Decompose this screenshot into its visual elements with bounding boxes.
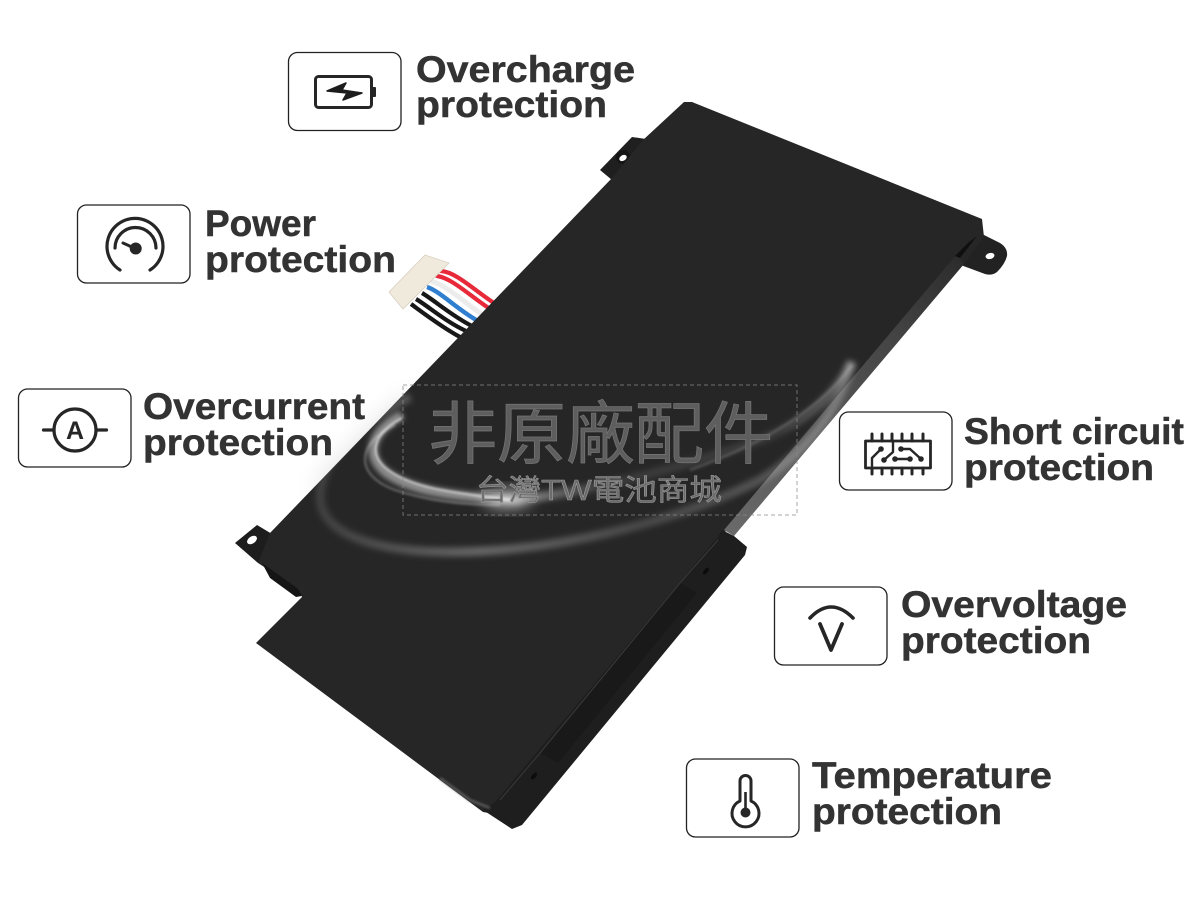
- outer swirl wide: [320, 362, 852, 552]
- label: protection: [901, 620, 1091, 661]
- mounting tab: left: [235, 525, 285, 563]
- feature: temperature protection: [686, 755, 1052, 837]
- icon: circuit chip: [866, 434, 930, 474]
- icon box: [840, 412, 952, 490]
- bottom flap: [483, 530, 747, 829]
- watermark sub text: 台灣TW電池商城: [476, 474, 722, 507]
- watermark: [403, 385, 797, 515]
- icon: gauge: [107, 218, 163, 270]
- connector housing: [389, 255, 449, 309]
- feature: short circuit protection: [840, 411, 1184, 490]
- connector cable: [389, 255, 494, 337]
- battery body: [256, 102, 984, 815]
- icon: ammeter: [44, 409, 106, 451]
- feature: overvoltage protection: [774, 584, 1127, 665]
- icon: ammeter: A: [66, 417, 84, 445]
- wires: black: [411, 293, 472, 337]
- label: protection: [964, 447, 1154, 488]
- slot upper: [702, 567, 710, 575]
- label: Overvoltage: [901, 584, 1127, 625]
- icon: thermometer: [732, 776, 759, 827]
- icon: battery with bolt: [316, 76, 376, 108]
- icon: voltage arc and V: [810, 607, 853, 650]
- far arc glint: [690, 365, 852, 470]
- watermark main text: 非原廠配件: [428, 397, 773, 473]
- icon box: [288, 52, 401, 130]
- wires: blue: [427, 287, 480, 322]
- label: Short circuit: [964, 411, 1184, 452]
- soft shadow near left edge: [310, 400, 440, 490]
- label: Temperature: [812, 755, 1052, 796]
- inner swirl glow: [373, 362, 852, 500]
- feature: overcharge protection: [288, 49, 635, 130]
- label: protection: [205, 239, 396, 280]
- left step shading: [262, 563, 302, 597]
- mounting tab: top: [600, 137, 646, 180]
- inner swirl core: [376, 418, 510, 500]
- icon box: [774, 587, 887, 665]
- label: Power: [205, 203, 316, 244]
- feature: power protection: [78, 203, 396, 283]
- flap recess: [540, 583, 697, 763]
- right edge strip: [724, 254, 964, 536]
- flap inner line: [500, 540, 718, 800]
- connector notch on edge: [955, 236, 977, 258]
- wires: white: [431, 281, 484, 316]
- inner swirl second line: [365, 425, 500, 505]
- mounting tab: right: [958, 232, 1007, 275]
- feature: overcurrent protection: [18, 386, 365, 467]
- watermark frame: [403, 385, 797, 515]
- wires: red: [437, 271, 494, 309]
- label: Overcurrent: [143, 386, 365, 427]
- icon box: [18, 389, 131, 467]
- icon box: [78, 205, 190, 283]
- battery illustration: [235, 102, 1007, 829]
- bright spot: [483, 491, 531, 507]
- label: Overcharge: [416, 49, 635, 90]
- light swirl: [320, 362, 852, 552]
- label: protection: [416, 84, 607, 125]
- slot lower: [530, 772, 538, 780]
- icon box: [686, 759, 799, 837]
- label: protection: [143, 422, 333, 463]
- label: protection: [812, 791, 1002, 832]
- bottom edge highlight: [440, 778, 490, 808]
